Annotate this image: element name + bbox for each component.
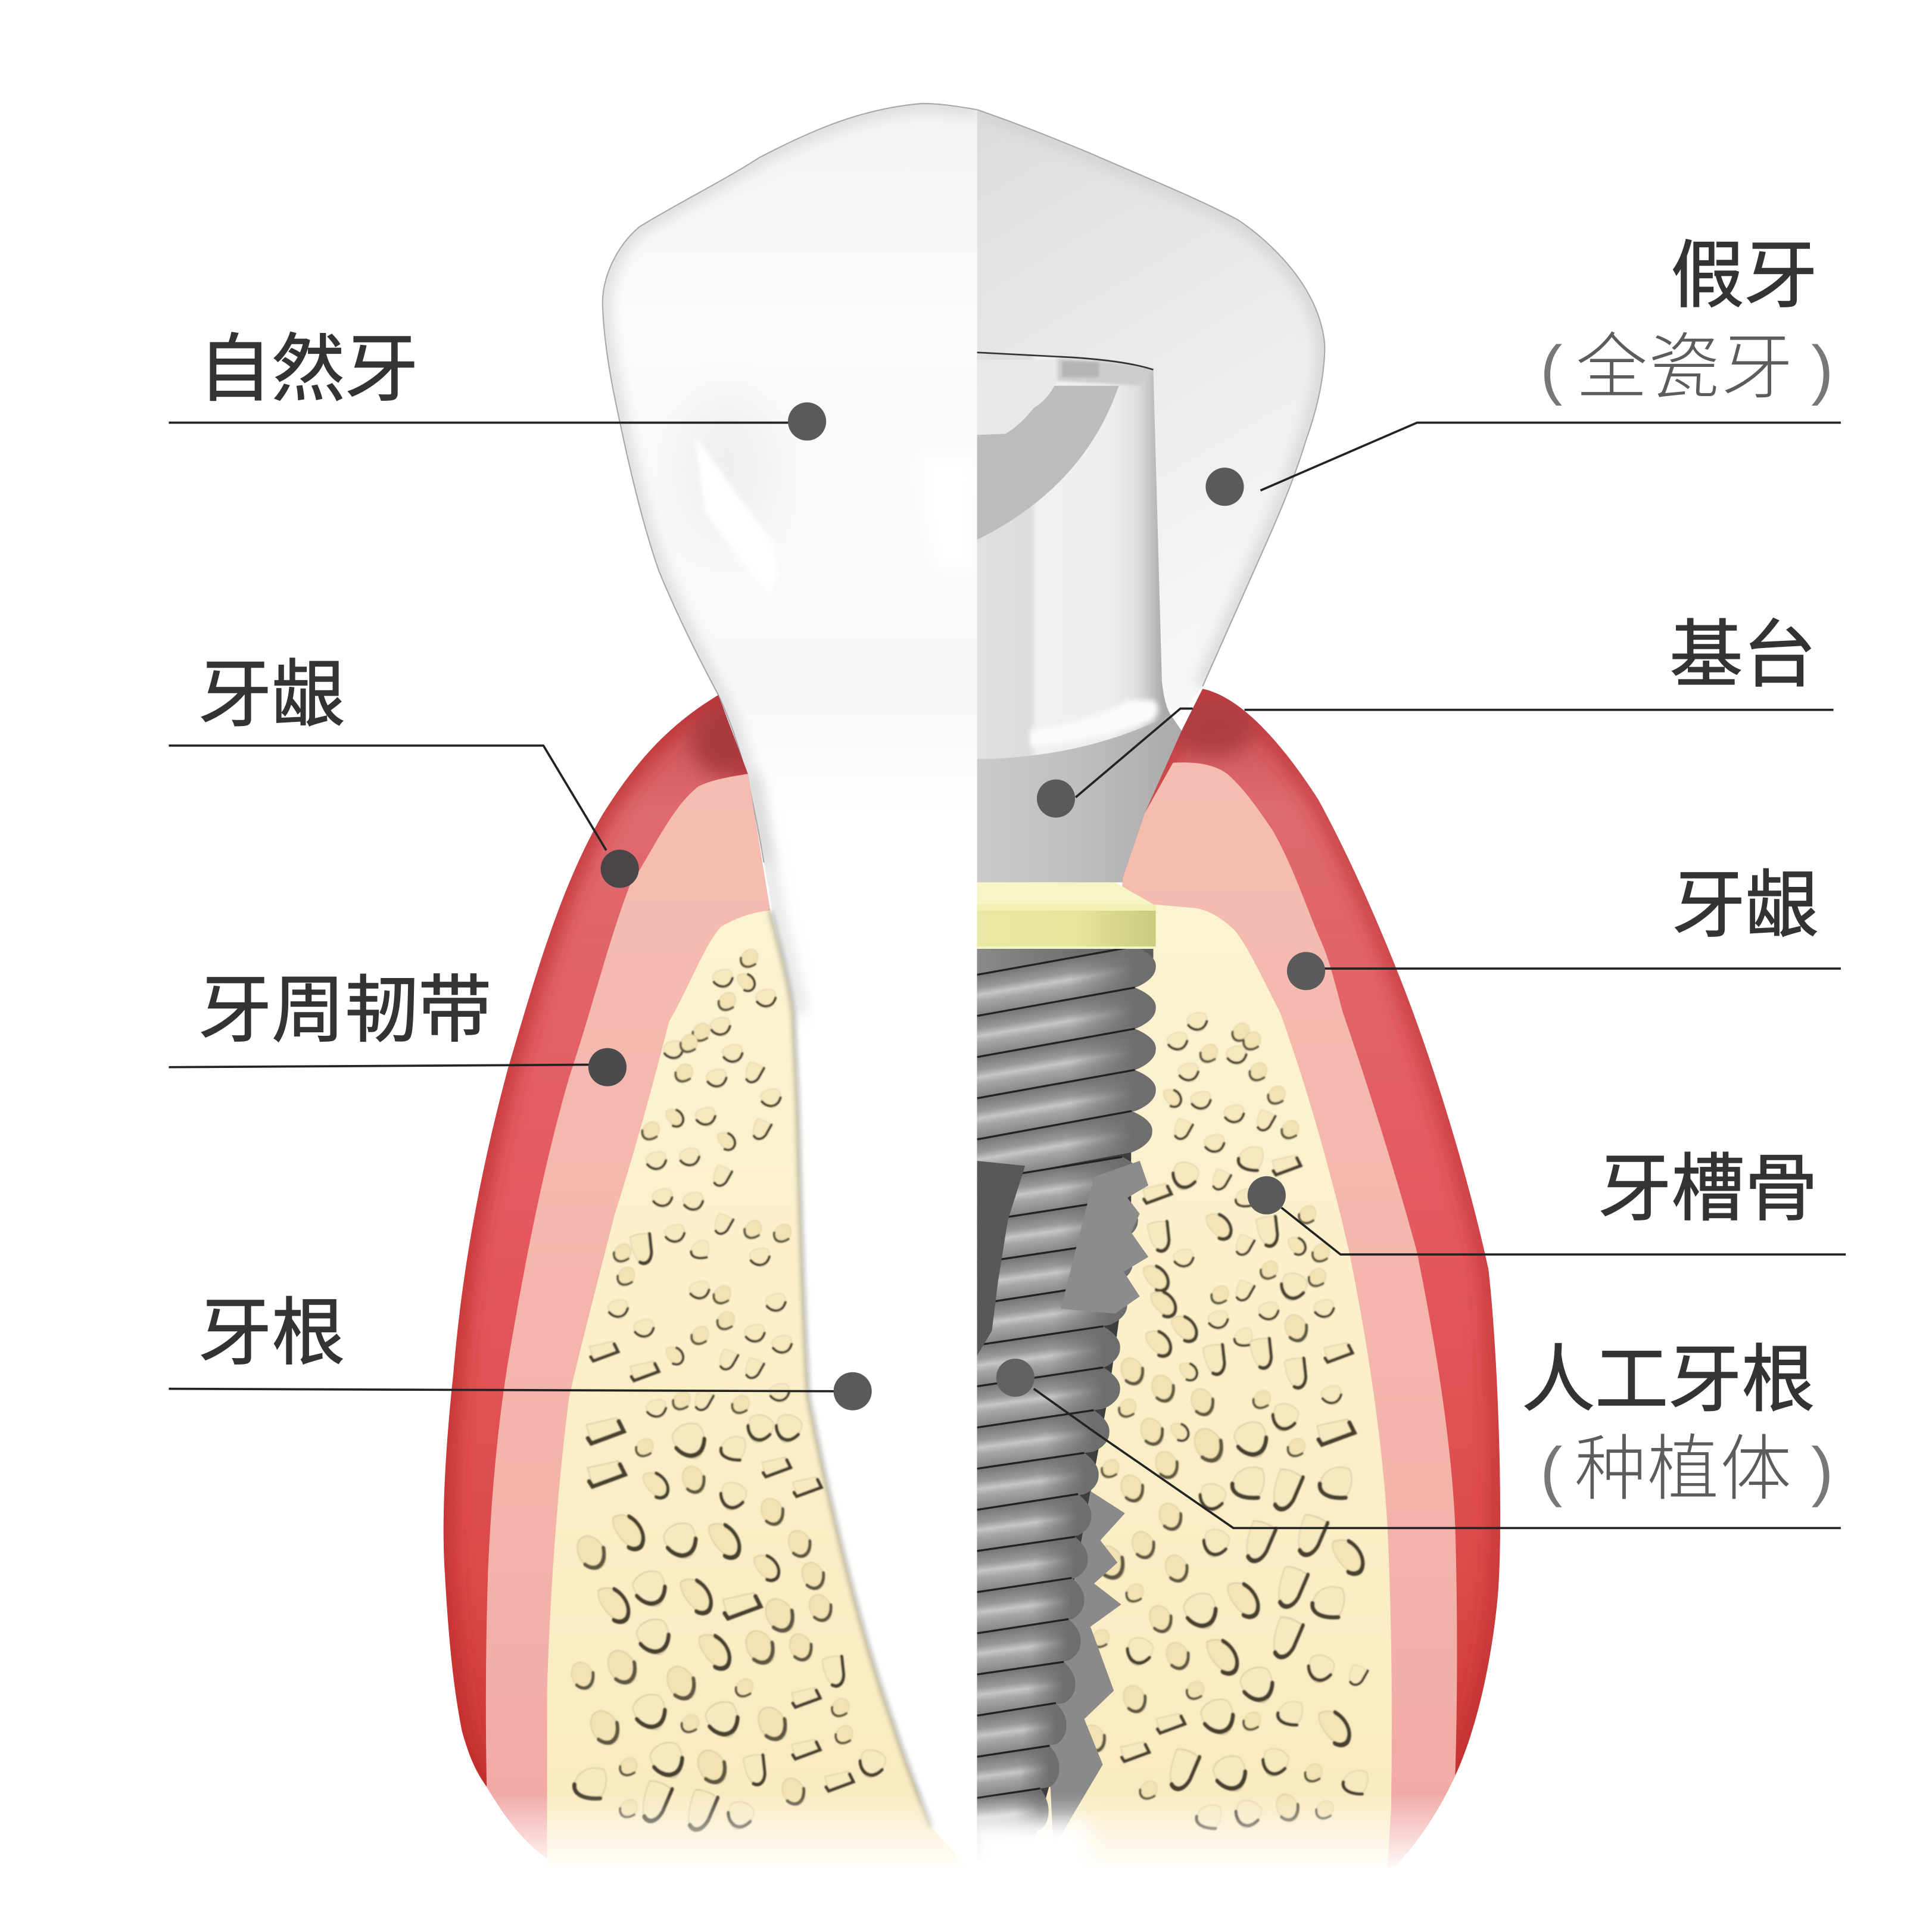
- label: artificial root: 人工牙根: [1522, 1340, 1815, 1421]
- label: implant: ): [1811, 1434, 1835, 1508]
- label: implant: 种植体: [1575, 1430, 1793, 1509]
- panel: left alveolar bone: [547, 911, 967, 1867]
- bottom fade: [419, 1793, 1528, 1895]
- implant screw threads: [977, 946, 1156, 1861]
- leader lines: [169, 423, 1846, 1528]
- panel: left gum outer layer: [444, 695, 789, 1861]
- label: gum left: 牙龈: [198, 654, 345, 736]
- abutment: [977, 353, 1182, 882]
- label: tooth root: 牙根: [198, 1293, 345, 1374]
- label: all-ceramic crown: 全瓷牙: [1576, 328, 1794, 407]
- implant collar: [977, 882, 1156, 949]
- panel: prosthetic crown: [977, 110, 1325, 739]
- right bone pores: [1079, 1011, 1370, 1832]
- left bone pores: [567, 946, 888, 1834]
- panel: natural tooth: [602, 102, 977, 1016]
- label: false tooth: 假牙: [1671, 235, 1818, 317]
- label: natural tooth: 自然牙: [198, 329, 418, 410]
- panel: right alveolar bone: [977, 905, 1392, 1867]
- label: abutment: 基台: [1669, 615, 1816, 696]
- marker dots: [588, 403, 1325, 1410]
- panel: left inner gum: [486, 774, 789, 1858]
- label: all-ceramic crown: ): [1811, 332, 1835, 406]
- label: alveolar bone: 牙槽骨: [1598, 1148, 1818, 1230]
- label: periodontal ligament: 牙周韧带: [198, 970, 491, 1051]
- panel: right gum outer layer: [1123, 689, 1500, 1867]
- label: implant: (: [1540, 1434, 1563, 1508]
- panel: right inner gum: [1123, 762, 1457, 1867]
- label: all-ceramic crown: (: [1540, 332, 1563, 406]
- label: gum right: 牙龈: [1672, 865, 1819, 946]
